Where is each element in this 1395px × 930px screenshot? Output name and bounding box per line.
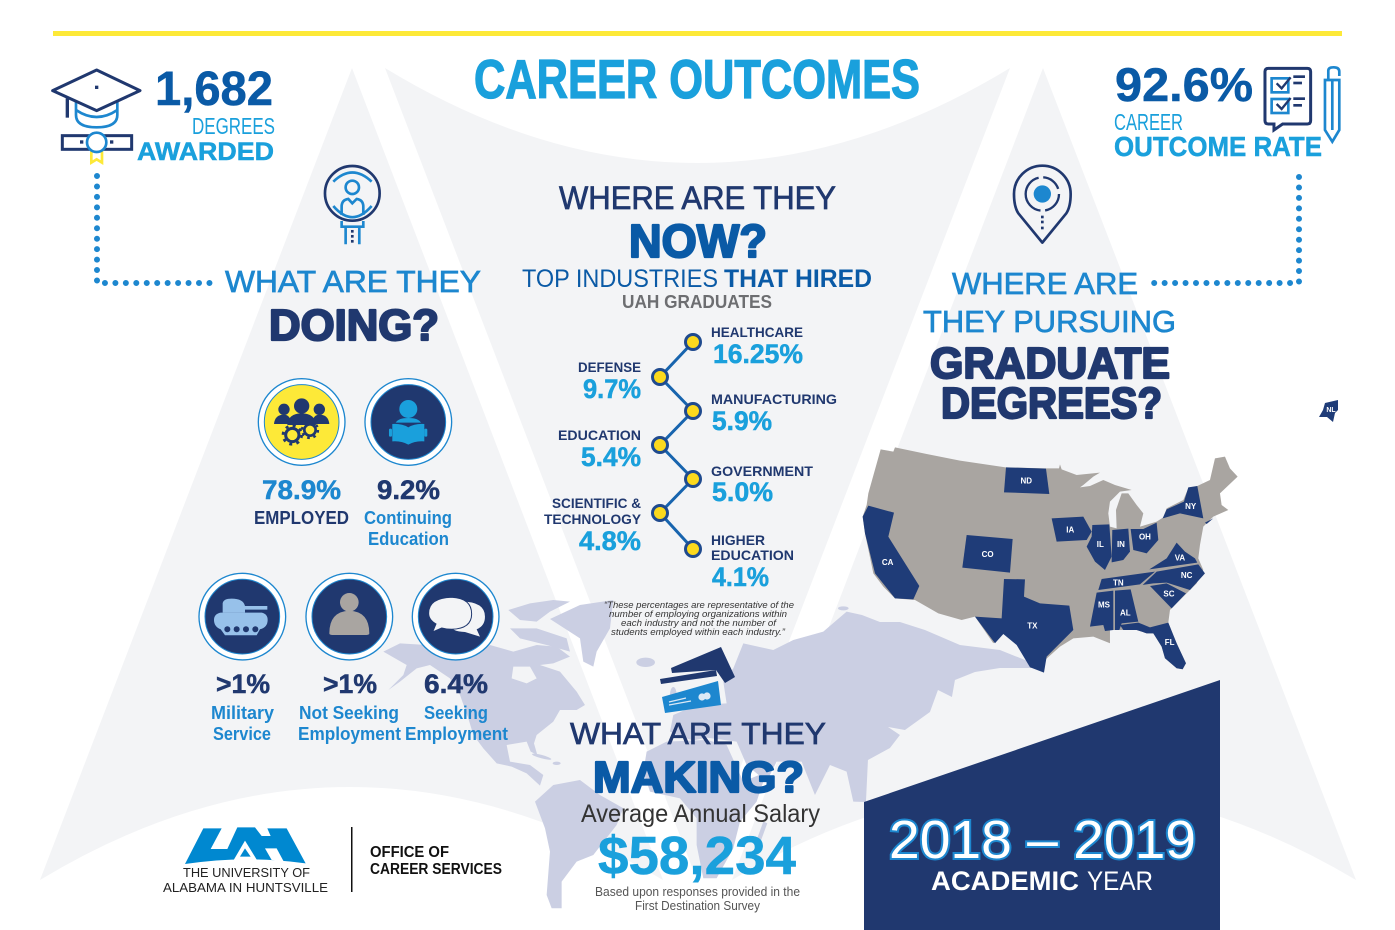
icon: credit cards — [660, 647, 735, 713]
US map: VA — [1175, 553, 1185, 562]
stat: salary: $58,234 — [598, 826, 796, 886]
stat: employed — [254, 475, 349, 528]
stat: career outcome rate — [1114, 58, 1322, 162]
panel: academic year: ACADEMIC — [931, 866, 1079, 896]
footnote: “These percentages are representative of the — [604, 600, 794, 610]
heading: graduate degrees — [923, 266, 1176, 428]
stat: military service: Military — [211, 703, 274, 723]
stat: seeking employment: 6.4% — [424, 669, 488, 699]
heading: what are they doing: WHAT ARE THEY — [225, 264, 481, 299]
stat: degrees awarded: DEGREES — [192, 113, 275, 139]
heading: where are they now — [522, 180, 872, 312]
panel: academic year — [864, 680, 1220, 930]
stat: salary — [595, 826, 800, 913]
title: CAREER OUTCOMES — [474, 48, 920, 110]
chain chart: top industries: SCIENTIFIC & — [552, 495, 641, 511]
stat: employed: EMPLOYED — [254, 508, 349, 528]
icon: employed — [258, 379, 345, 465]
icon: person not seeking — [306, 573, 393, 660]
stat: continuing education: 9.2% — [377, 475, 440, 505]
panel: academic year: YEAR — [1087, 866, 1153, 896]
heading: where are they now: NOW? — [629, 215, 767, 267]
heading: what are they doing: DOING? — [269, 301, 439, 350]
logo: university and office: CAREER SERVICES — [370, 861, 502, 878]
heading: where are they now: UAH GRADUATES — [622, 292, 772, 312]
stat: continuing education — [364, 475, 452, 549]
footnote: number of employing organizations within — [609, 609, 787, 619]
heading: graduate degrees: WHERE ARE — [952, 266, 1138, 301]
US map: IL — [1097, 540, 1104, 549]
US map: NY — [1185, 502, 1197, 511]
chain chart: top industries: 9.7% — [583, 374, 641, 404]
US map: AL — [1120, 609, 1131, 618]
stat: seeking employment: Seeking — [424, 703, 488, 723]
US map: NC — [1181, 571, 1193, 580]
icon: Netherlands: NL — [1326, 407, 1336, 414]
chain chart: top industries: 5.9% — [712, 406, 772, 436]
footnote: each industry and not the number of — [621, 618, 778, 628]
heading: graduate degrees: GRADUATE — [930, 339, 1170, 388]
stat: career outcome rate: CAREER — [1114, 109, 1183, 135]
chain chart: top industries: MANUFACTURING — [711, 391, 837, 407]
stat: degrees awarded — [137, 63, 275, 166]
footnote — [604, 600, 794, 637]
chain chart: top industries: 4.8% — [579, 526, 641, 556]
US map: SC — [1163, 589, 1175, 598]
logo: university and office: ALABAMA IN HUNTSVILLE — [163, 880, 328, 895]
stat: degrees awarded: AWARDED — [137, 138, 274, 166]
icon: location pin — [1014, 166, 1071, 243]
US map: FL — [1165, 638, 1175, 647]
stat: military service: >1% — [216, 669, 270, 699]
chain chart: top industries: EDUCATION — [558, 427, 641, 443]
stat: career outcome rate: OUTCOME RATE — [1114, 131, 1322, 162]
logo: university and office — [163, 827, 502, 895]
stat: employed: 78.9% — [262, 475, 341, 505]
stat: not seeking employment: Employment — [298, 724, 401, 744]
top yellow rule — [53, 31, 1342, 36]
dotted connector right — [1153, 177, 1299, 283]
stat: not seeking employment: >1% — [323, 669, 377, 699]
heading: where are they now: WHERE ARE THEY — [559, 180, 836, 216]
chain chart: top industries: EDUCATION — [711, 547, 794, 563]
world map silhouette — [383, 600, 1045, 908]
dotted connector left — [97, 176, 212, 283]
stat: military service — [211, 669, 274, 744]
stat: military service: Service — [213, 724, 271, 744]
icon: person in magnifier — [325, 166, 380, 244]
chain chart: top industries — [544, 324, 837, 592]
icon: checklist and pencil — [1265, 67, 1339, 142]
stat: salary: First Destination Survey — [635, 899, 761, 913]
chain chart: top industries: HEALTHCARE — [711, 324, 803, 340]
heading: what are they making — [570, 716, 826, 828]
stat: seeking employment: Employment — [405, 724, 508, 744]
US map: TX — [1027, 621, 1038, 630]
heading: what are they doing — [225, 264, 481, 350]
US map: TN — [1113, 579, 1124, 588]
chain chart: top industries: TECHNOLOGY — [544, 511, 642, 527]
chain chart: top industries: 5.4% — [581, 442, 641, 472]
US map: IN — [1117, 540, 1125, 549]
chain chart: top industries: DEFENSE — [578, 359, 641, 375]
stat: salary: Based upon responses provided in the — [595, 885, 800, 899]
stat: career outcome rate: 92.6% — [1115, 58, 1253, 111]
heading: what are they making: Average Annual Salary — [581, 800, 820, 828]
icon: speech bubbles — [412, 573, 499, 660]
stat: not seeking employment: Not Seeking — [299, 703, 399, 723]
stat: degrees awarded: 1,682 — [155, 63, 273, 116]
footnote: students employed within each industry.” — [611, 627, 786, 637]
heading: where are they now: TOP INDUSTRIES — [522, 265, 718, 293]
stat: seeking employment — [405, 669, 508, 744]
panel: academic year: 2018 – 2019 — [889, 810, 1196, 870]
US map: IA — [1066, 526, 1075, 535]
US map: CA — [882, 558, 894, 567]
chain chart: top industries: 5.0% — [712, 477, 773, 507]
logo: university and office: OFFICE OF — [370, 844, 449, 861]
heading: graduate degrees: THEY PURSUING — [923, 304, 1176, 339]
US map: CO — [982, 550, 994, 559]
heading: graduate degrees: DEGREES? — [941, 379, 1162, 428]
chain chart: top industries: 16.25% — [713, 339, 803, 369]
stat: continuing education: Education — [368, 529, 449, 549]
icon: continuing education — [365, 379, 452, 465]
icon: graduation cap and diploma — [53, 70, 140, 163]
heading: what are they making: MAKING? — [593, 753, 804, 802]
icon: Netherlands — [1319, 400, 1338, 422]
chain chart: top industries: 4.1% — [712, 562, 769, 592]
stat: not seeking employment — [298, 669, 401, 744]
US map — [863, 447, 1238, 673]
US map: MS — [1098, 601, 1111, 610]
logo: university and office: THE UNIVERSITY OF — [183, 865, 310, 880]
chain chart: top industries: HIGHER — [711, 532, 765, 548]
stat: continuing education: Continuing — [364, 508, 452, 528]
chain chart: top industries: GOVERNMENT — [711, 463, 813, 479]
US map: ND — [1021, 477, 1032, 486]
heading: what are they making: WHAT ARE THEY — [570, 716, 826, 751]
heading: where are they now: THAT HIRED — [724, 265, 872, 293]
US map: OH — [1139, 533, 1151, 542]
icon: military tank — [199, 573, 286, 660]
